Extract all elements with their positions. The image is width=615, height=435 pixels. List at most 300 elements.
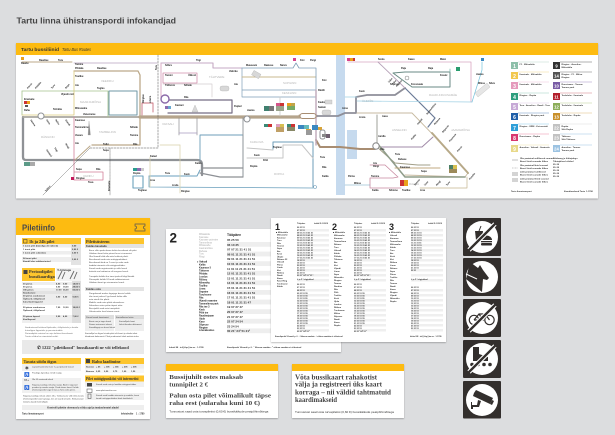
ticket block: card fares: Kaardi saab osta ja laadida müügipunktides xyxy=(96,383,136,386)
map: stop names: Kaunase xyxy=(75,119,86,122)
map: diagonal stop labels: Tähe xyxy=(391,79,398,86)
icon: CCTV camera xyxy=(463,381,501,418)
map: stop names: Filtri xyxy=(263,159,269,162)
timetable 2 times: 08 01 21 31 41 51 xyxy=(354,234,371,237)
timetable 3 stops: Aia xyxy=(390,252,394,255)
back sheet footer: Infotel 88 · inf@tbp@tar.ee · 1:1780 xyxy=(169,346,204,349)
timetable 1 stops: ■ Mõisaküla xyxy=(276,231,289,234)
map footer xyxy=(511,190,594,193)
district labels: RAADI-KRUUSAMÄE xyxy=(429,93,457,97)
map: diagonal stop labels: Jaamamõisa xyxy=(425,102,437,116)
timetable rows: 16 01 11 21 31 41 51 xyxy=(227,291,256,295)
stop list: Kaunase 5 xyxy=(199,266,212,270)
legend column 1: 6 xyxy=(513,115,516,121)
icon: no roller skates xyxy=(463,340,501,378)
timetable 2 stops: Pihlaka xyxy=(334,256,342,258)
timetable 1 times: Tööpäev xyxy=(297,223,306,225)
notice: bus card: Võta bussikaart rahakotist xyxy=(295,374,378,382)
legend column 1: Ringtee · ERM · Kvissentali xyxy=(520,125,548,128)
ticket block: free rides: 65+ xyxy=(24,378,29,382)
timetable 1 times: 12 21 51 55 xyxy=(297,300,308,302)
timetable 1 times: 08 21 51 xyxy=(297,290,306,292)
stop list: Kalda xyxy=(199,264,206,266)
notice: on-board ticket price: tunnipilet 2 € xyxy=(169,382,209,389)
ticket block: card fares: Boonus xyxy=(86,371,95,373)
map: diagonal stop labels: Turu xyxy=(445,180,451,187)
map: stop names: Riia xyxy=(184,96,189,99)
legend: line types: 05–20 xyxy=(553,170,560,172)
map: stop names: Tähtvere xyxy=(165,84,176,87)
ticket block: card fares: + 20€ xyxy=(122,366,128,368)
route: south lines xyxy=(133,176,143,188)
timetable 1 stops: Sepa xyxy=(277,248,283,250)
map: stop names: Mõisavahe xyxy=(75,107,88,110)
map footer: 1:1780 xyxy=(586,191,594,193)
ticket footer xyxy=(22,412,145,416)
map: stop names: Maisi xyxy=(440,58,446,61)
timetable 3 stops: Pärna xyxy=(390,273,397,276)
ticket block: card fares: 0,75 xyxy=(113,371,118,373)
ticket block: period tickets: bussikaardiga xyxy=(29,274,56,279)
legend column 1: Ringtee · Ropka xyxy=(520,94,537,97)
timetable grids xyxy=(297,229,443,332)
timetable 1 times: 11 01 21 31 41 51 xyxy=(297,242,314,244)
timetable 3 times: 18 21 51 xyxy=(411,318,420,320)
timetable 3 times: 14 21 51 xyxy=(411,307,420,310)
map: stop names: Anne xyxy=(342,107,349,110)
route numbers: 3 xyxy=(389,222,394,232)
timetable 1 times: 15 21 51 55 xyxy=(297,308,308,310)
route: Supilinn xyxy=(242,68,316,97)
timetable 2 stops: Mõisavahe xyxy=(334,234,345,237)
legend: line types: Bussi liinid suunade lõikes xyxy=(520,167,549,170)
stop list: Rebase xyxy=(199,250,208,253)
timetable 2 times: 16 01 21 31 41 51 xyxy=(354,254,371,257)
map: diagonal stop labels: Turu xyxy=(155,64,158,70)
ticket block: period tickets: 90 päeva soodustuse xyxy=(23,306,46,309)
map: diagonal stop labels: Vasara xyxy=(29,119,36,127)
stop list: Turuhoone xyxy=(199,294,212,296)
ticket block: card fares: 1,00 xyxy=(122,371,127,373)
map: stop names: Kastani xyxy=(175,104,184,107)
map: stop names: Sepa xyxy=(421,170,427,173)
timetable 1 stops: Turu xyxy=(277,239,282,242)
district labels: SUPILINN xyxy=(283,81,296,85)
map: stop names: Tammi xyxy=(165,74,173,77)
stop list: Kaunase xyxy=(199,236,209,239)
timetable 1 stops: Kaare xyxy=(277,277,284,280)
map: stop names: Tamme xyxy=(371,175,380,178)
ticket block: card fares: Kaardi saab laadida internetis ja mobiilis; bussi xyxy=(96,394,140,397)
icon: no dogs xyxy=(463,258,501,296)
timetable 1 times: 19 21 51 55 xyxy=(297,318,308,320)
timetable 2 stops: Vaksali xyxy=(334,250,341,252)
timetable 2 times: 06 21 51 xyxy=(354,227,363,229)
ticket block: validation: Sularahas ostes palun täpset raha. xyxy=(89,304,123,307)
ticket block: validation: osta ainult ühe piletit. xyxy=(89,298,110,301)
timetable 1 times: 06 21 51 xyxy=(297,227,306,229)
map: stop names: Aia xyxy=(75,142,79,145)
ticket block: period tickets: Soodustused kehtivad õpilastele, üliõpilastele ja lastele xyxy=(25,326,79,329)
legend column 1: 5 xyxy=(513,105,516,111)
map: stop names: Ülikool xyxy=(188,74,196,77)
ticket block: validation: Ühel kaardil võib olla mitu kehtivat piletit. xyxy=(89,255,129,258)
timetable 2 times: 07 21 51 xyxy=(354,287,363,289)
map: stop names: Sepa xyxy=(103,149,109,152)
ticket block: period tickets: 4,90 xyxy=(56,282,61,286)
ticket block: validation: Bussikaardi hind on 2 eurot ja seda saab xyxy=(89,261,129,264)
timetable rows: 13 01 11 21 31 41 51 xyxy=(227,276,256,280)
route numbers: 1 xyxy=(275,222,280,232)
ticket block: period tickets: 9,90 xyxy=(56,286,61,288)
ticket block: period tickets: 6,00 xyxy=(63,296,68,298)
ticket block: hourly tickets: 24 tunni pilet xyxy=(23,257,37,260)
map: stop names: Rüütli xyxy=(318,89,325,92)
map legend: route list xyxy=(511,62,594,193)
ticket footer: Tartu linnatransport xyxy=(22,412,44,416)
map: stop names: Raudtee xyxy=(97,67,107,70)
legend column 1: Annelinn · Vaksali · Ilmatsalu xyxy=(520,146,550,149)
timetable 2 times: 10 21 51 55 xyxy=(354,296,365,298)
map: stop names: Jaama xyxy=(247,109,255,112)
map: stop names: Tehnika xyxy=(53,108,63,111)
panel: bus route map xyxy=(16,43,598,198)
timetable 3 times: 13 21 51 xyxy=(411,306,420,308)
ticket footer: Infotahvlite xyxy=(121,412,134,416)
icon: no bicycles xyxy=(463,299,501,337)
ticket block: period tickets: 30 päeva xyxy=(23,284,33,286)
map: stop names: Nõmme xyxy=(389,189,398,192)
map: stop names: Muuseum xyxy=(246,64,257,67)
ticket block: period tickets: Koolilapsed xyxy=(23,319,36,321)
back sheet footer xyxy=(169,346,302,349)
timetable rows: 06 10 35 xyxy=(227,243,239,247)
ticket block: period tickets: Perioodipilet xyxy=(29,269,53,274)
stop list: Riia xyxy=(199,296,204,300)
river xyxy=(336,55,357,195)
notice: bus card: korraga – nii väldid tahtmatuid xyxy=(295,389,391,396)
timetable 3 times: 17 21 51 xyxy=(411,316,420,318)
ticket block: hourly tickets: 1h ja 24h pilet xyxy=(29,239,55,244)
map: stop names: Kroonuaia xyxy=(411,83,423,86)
timetable 3 times: 06 21 51 xyxy=(411,287,420,289)
ticket block: free rides: Sügava puudega isikud, alates 16a. Täiskasvanu võib sõita tasuta xyxy=(23,394,85,398)
ticket footer: 1 : 1780 xyxy=(136,414,145,416)
timetable 3 times: 10 21 31 51 xyxy=(411,240,422,242)
timetable 1 times: 10 21 51 55 xyxy=(297,296,308,298)
timetable 1 times: 19 21 51 xyxy=(297,262,306,264)
stop list: Mõisavahe xyxy=(199,244,211,247)
timetable 3 times: 15 21 51 xyxy=(411,310,420,312)
ticket block: period tickets: Perioodipilet ostmisel on vaja kehtivat bussikaarti. xyxy=(25,332,74,335)
ticket block: period tickets: kutsekooli õppurid xyxy=(23,300,43,304)
stop list xyxy=(197,233,219,332)
ticket block: free rides: Tasuta sõidu õigus xyxy=(24,359,57,364)
map: diagonal stop labels: Aiandi xyxy=(416,118,424,126)
timetable 2 times: 17 21 51 55 xyxy=(354,313,365,315)
district labels: VARIKU xyxy=(83,174,94,178)
map: diagonal stop labels: Kaseke xyxy=(468,172,477,181)
timetable 1 stops: Mõisavahe xyxy=(277,234,288,237)
icon: no food or drink xyxy=(463,218,501,256)
timetable 3 times: 13 21 31 51 xyxy=(411,248,422,250)
timetable rows: Tööpäev xyxy=(227,233,241,237)
legend column 2: Ringtee xyxy=(562,76,570,79)
ticket block: card fares: + 5€ xyxy=(96,366,101,368)
timetable 3 times: 09 21 51 xyxy=(411,296,420,298)
ticket block: card fares: www.piletimaailm.com xyxy=(96,389,117,392)
ticket block: validation: kaitseb see kadumise või varguse korral. xyxy=(89,270,129,273)
legend column 2: 9 xyxy=(555,64,558,68)
stop list: Loodus xyxy=(199,276,208,278)
timetable 1 times xyxy=(297,222,328,333)
timetable 2 times: 20 21 51 xyxy=(354,265,363,267)
timetable 3 times: L ja P / riigipühad xyxy=(411,279,428,281)
timetable 3 times: 09 21 31 51 xyxy=(411,238,422,240)
timetable 2 stops: Kivi xyxy=(334,265,338,267)
map: stop names: Sadam xyxy=(318,106,326,109)
map: stop names: Mõisa xyxy=(354,182,361,185)
stop list: Ujula xyxy=(199,318,206,320)
stop list: Turu xyxy=(199,253,204,256)
district labels: VAKSALI xyxy=(162,122,174,126)
timetable 3 times: 22 21 51 xyxy=(411,328,420,330)
ticket block: validation: Bussi ees ja taga uksed xyxy=(89,320,112,323)
legend: line types: 05–20 xyxy=(553,173,560,175)
ticket notice: Kontrolli piletite olemasolu sõidu ajal ja teadaolevatel aladel xyxy=(47,406,119,410)
timetable rows: 14 01 11 21 31 41 51 xyxy=(227,281,256,285)
map: stop names: Aia xyxy=(75,84,79,87)
front sheet footer xyxy=(275,335,441,338)
map: stop names: Linda xyxy=(172,184,179,187)
timetable 3 stops: Tuuliku xyxy=(390,277,398,279)
legend column 1: 2 xyxy=(513,74,516,80)
timetable 2 times: 15 21 51 55 xyxy=(354,308,365,310)
map: diagonal stop labels: Kalda xyxy=(410,133,417,141)
map: stop names: Turu xyxy=(395,153,401,156)
map: stop names: Pargi xyxy=(310,59,316,62)
stop list: Ringtee xyxy=(199,326,208,330)
legend column 1: Roosisaare · Ropka xyxy=(520,136,541,138)
map: stop names: Vasara xyxy=(75,134,83,137)
timetable 2 times: 21 21 51 55 xyxy=(354,323,365,325)
map: stop names: Tiigi xyxy=(196,59,201,62)
map: stop names: Aru xyxy=(373,162,378,165)
map: stop names: Vanemuise xyxy=(83,113,96,116)
map: stop names: Paju xyxy=(401,67,407,70)
ticket block: hourly tickets: 1 tunni pilet (kaardiga või rakend) xyxy=(23,244,58,248)
timetable 3 stops: Raadi xyxy=(390,286,396,288)
ticket block: free rides: Puudega lapsed ja nende saatja xyxy=(32,372,63,374)
legend: line types: Tähtajalised sõidud xyxy=(553,160,574,163)
timetable 2 stops: Ropka xyxy=(334,325,341,327)
timetable 2 stops xyxy=(333,231,347,327)
legend column 2: 23 xyxy=(554,136,559,140)
stop list: Linna xyxy=(199,288,206,290)
ticket block: validation: ühe tunni jooksul. Iga kaardi kohta võib xyxy=(89,295,128,298)
timetable 1 stops: Kalda xyxy=(277,286,284,288)
ticket block: hourly tickets: 0,60 xyxy=(72,246,77,248)
timetable rows xyxy=(227,233,271,333)
timetable 3 times: 11 21 51 xyxy=(411,300,420,302)
map: diagonal stop labels: Lõuna xyxy=(149,95,152,103)
timetable 2 stops: Rebase xyxy=(334,244,342,246)
ticket block: validation: Kuidas osta xyxy=(86,287,101,291)
legend column 1: Turu · Annelinn · Raadi · Turu xyxy=(520,104,551,107)
timetable 3 stops: Turu xyxy=(390,249,395,252)
map: stop names: Riia xyxy=(96,168,101,171)
timetable 3 times: 12 21 31 51 xyxy=(411,245,422,247)
timetable 1 stops: Kivi xyxy=(277,270,281,272)
map: diagonal stop labels: Ringi xyxy=(64,143,70,150)
map: stop names: Aardla xyxy=(378,135,386,138)
legend column 2: Ringtee · Annelinn · xyxy=(562,63,582,66)
timetable 1 stops: Raadi xyxy=(277,275,283,277)
timetable 2 times: 13 21 51 55 xyxy=(354,303,365,305)
ticket block: period tickets: 2,90 xyxy=(56,316,61,318)
legend: line types xyxy=(512,157,578,184)
ticket block: period tickets: Tasuta sõidud on nimetatud eraldi. xyxy=(25,335,59,338)
timetable rows: 21 07 27 47 xyxy=(227,315,243,319)
map: stop names: Raudtee xyxy=(39,59,49,62)
map: hub circles and stops xyxy=(38,76,409,188)
timetable 1 times: 16 21 51 55 xyxy=(297,310,308,312)
timetable 3 times: 11 21 31 51 xyxy=(411,242,422,244)
stop list: Riia tee 3 xyxy=(199,306,210,308)
map: stop names: Riia xyxy=(380,148,385,151)
timetable 1 times: 21 21 51 55 xyxy=(297,323,308,325)
timetable 2 stops: Sepa xyxy=(334,274,340,276)
timetable 2 times: 13 01 21 31 41 51 xyxy=(354,246,371,250)
timetable 1 times: 15 01 21 31 41 51 xyxy=(297,252,314,254)
timetable 2 stops: Rõõmu xyxy=(334,306,342,309)
timetable 3 times: 20 21 51 xyxy=(411,323,420,325)
notice: bus card: kaardimakseid xyxy=(295,397,337,404)
legend column 1: 1 xyxy=(513,64,516,70)
ticket block: validation: laadida internetis või müügipunktides. xyxy=(89,264,126,267)
front sheet footer: Infotel 88 · inf@tbp@tar.ee · 1:1780 xyxy=(410,335,441,338)
ticket block: period tickets: 9,00 € xyxy=(72,296,79,298)
ticket block: period tickets: kutseõppe õppuritele ja pensionäridele. xyxy=(25,329,63,332)
stop list: Raudteejaam xyxy=(199,314,214,318)
map: diagonal stop labels: Rahu xyxy=(54,119,60,126)
timetable 3 times: 21 21 51 xyxy=(411,326,420,328)
district labels: VEERIKU xyxy=(101,79,114,83)
timetable 2 times: 11 21 51 55 xyxy=(354,298,365,300)
stop list: Sõpruse xyxy=(199,324,209,326)
legend column 2: Sõit Tähtvere xyxy=(562,138,576,141)
timetable 1 stops: Tamme xyxy=(277,246,285,248)
route numbers: 2 xyxy=(332,222,337,232)
timetable 3 stops: Kesk xyxy=(390,256,396,258)
ticket block: validation: Kontrollijale kaart xyxy=(119,320,135,323)
map: diagonal stop labels: Tamme xyxy=(413,178,421,187)
stop list: Lõunakeskus xyxy=(199,329,215,332)
legend column 2: 13 xyxy=(554,114,559,120)
map: stop names: Tuglase xyxy=(273,146,283,149)
ticket block: free rides: ühistranspordis kogu linnas ja Tartu valla piires. xyxy=(32,388,76,392)
timetable 1 times: 18 21 51 xyxy=(297,260,306,262)
legend column 2: Roosisaare · Tamme xyxy=(562,84,584,86)
title: Tartu linna ühistranspordi infokandjad xyxy=(16,16,176,26)
timetable 1 stops: Turuhoone xyxy=(277,282,289,285)
timetable 2 stops: Kaunase xyxy=(334,238,344,240)
map: stop names xyxy=(21,58,496,193)
legend column 2: 24 xyxy=(554,146,559,152)
timetable 3 times: 18 21 51 xyxy=(411,260,420,262)
legend: line types: 05–20 xyxy=(553,164,560,166)
ticket block: validation: Piletisüsteem xyxy=(86,239,110,244)
timetable 3 times: 12 21 51 xyxy=(411,303,420,305)
timetable 2 stops: Riia xyxy=(334,289,339,291)
map: stop names: Kalevi xyxy=(150,155,157,158)
timetable 1 times: 23 21 51 xyxy=(297,328,306,330)
timetable 2 stops: Raudtee xyxy=(334,285,343,288)
panel: timetable back sheet xyxy=(166,229,341,352)
stop list: Vijandi maantee xyxy=(199,300,218,302)
timetable 2 times: 20 21 51 55 xyxy=(354,320,365,322)
timetable 2 times: 07 21 51 xyxy=(354,230,363,232)
timetable rows: 09 01 11 21 31 41 51 xyxy=(227,257,256,261)
legend column 1: 8 xyxy=(513,136,516,142)
timetable 3 times: Tööpäev xyxy=(411,223,420,225)
legend column 2: Mõisaküla xyxy=(562,66,573,69)
route: Ülejõe trunk xyxy=(405,88,435,127)
ticket block: card fares: 0,25 xyxy=(96,371,101,373)
map: stop names: Linna xyxy=(359,116,366,119)
timetable 3 times: 17 21 31 51 xyxy=(411,258,422,260)
map: stop names: Kalda xyxy=(322,175,329,178)
notice: on-board ticket price: Palun osta pilet võimalikult täpse xyxy=(169,393,271,400)
map: stop names: Kesk xyxy=(184,173,190,176)
timetable rows: 00 21¹ 24² 51 21³ xyxy=(227,329,250,333)
timetable 2 stops: Nõmmiku xyxy=(334,276,344,279)
legend column 1: Ilmatsalu · Mõisaküla xyxy=(520,83,542,86)
legend column 2: Tähtvere xyxy=(562,135,571,138)
timetable 2 times: 09 21 51 55 xyxy=(354,293,365,295)
timetable rows: 19 07 27 47 xyxy=(227,305,243,309)
notice: on-board ticket price: Bussijuhilt ostes maksab xyxy=(169,374,243,381)
map: diagonal stop labels: Pihlaka xyxy=(34,81,43,90)
timetable 3 stops: Kaunase xyxy=(390,238,400,240)
ticket notice xyxy=(22,405,144,410)
ticket block: period tickets: 3,90 xyxy=(56,296,61,298)
ticket block: validation: Vahetusraha kuni kümme eurot. xyxy=(89,310,120,313)
timetable 3 stops: Tammelinna xyxy=(390,241,403,243)
ticket phone banner: ✆ 1222 "piletikood" bussikaardi nr või tellekood xyxy=(37,345,129,350)
map: diagonal stop labels: Kase xyxy=(45,119,51,126)
map: stop names: Kaubamaja xyxy=(318,101,331,104)
timetable 3 times: 21 21 51 xyxy=(411,268,420,270)
timetable 2 stops: ■ Mõisaküla xyxy=(333,231,346,234)
map: diagonal stop labels: Vaba xyxy=(387,77,394,84)
ticket block: validation: Kontrollimisel näita xyxy=(116,316,134,319)
timetable 1 stops: Rõõmu xyxy=(277,272,285,274)
ticket block: free rides: Üle 65 aastased isikud xyxy=(32,378,54,381)
legend column 1: Ilmatsalu · Mõisaküla xyxy=(520,73,542,76)
stop list: Tammelinna park xyxy=(199,302,219,306)
timetable 3 stops: Rõõmu xyxy=(390,261,398,264)
ticket block: validation: Pangakaardi makse lugejaga bussis kehtib xyxy=(89,292,131,295)
notice: bus card xyxy=(292,364,404,418)
ticket block: validation: Isikut tõendav dokument xyxy=(119,323,142,326)
legend column 2: Ringtee · F1 · Mõisa xyxy=(562,73,583,76)
timetable 1 times: 10 01 21 31 41 51 xyxy=(297,239,314,242)
ticket block: validation: Enne sõitu peab olema kehtiv bussikaart või pilet. xyxy=(89,249,137,252)
timetable 2 times: 22 21 51 xyxy=(354,326,363,328)
timetable 1 times: 18 21 51 55 xyxy=(297,316,308,318)
ticket block: period tickets: ½-hinnaga xyxy=(57,268,71,272)
